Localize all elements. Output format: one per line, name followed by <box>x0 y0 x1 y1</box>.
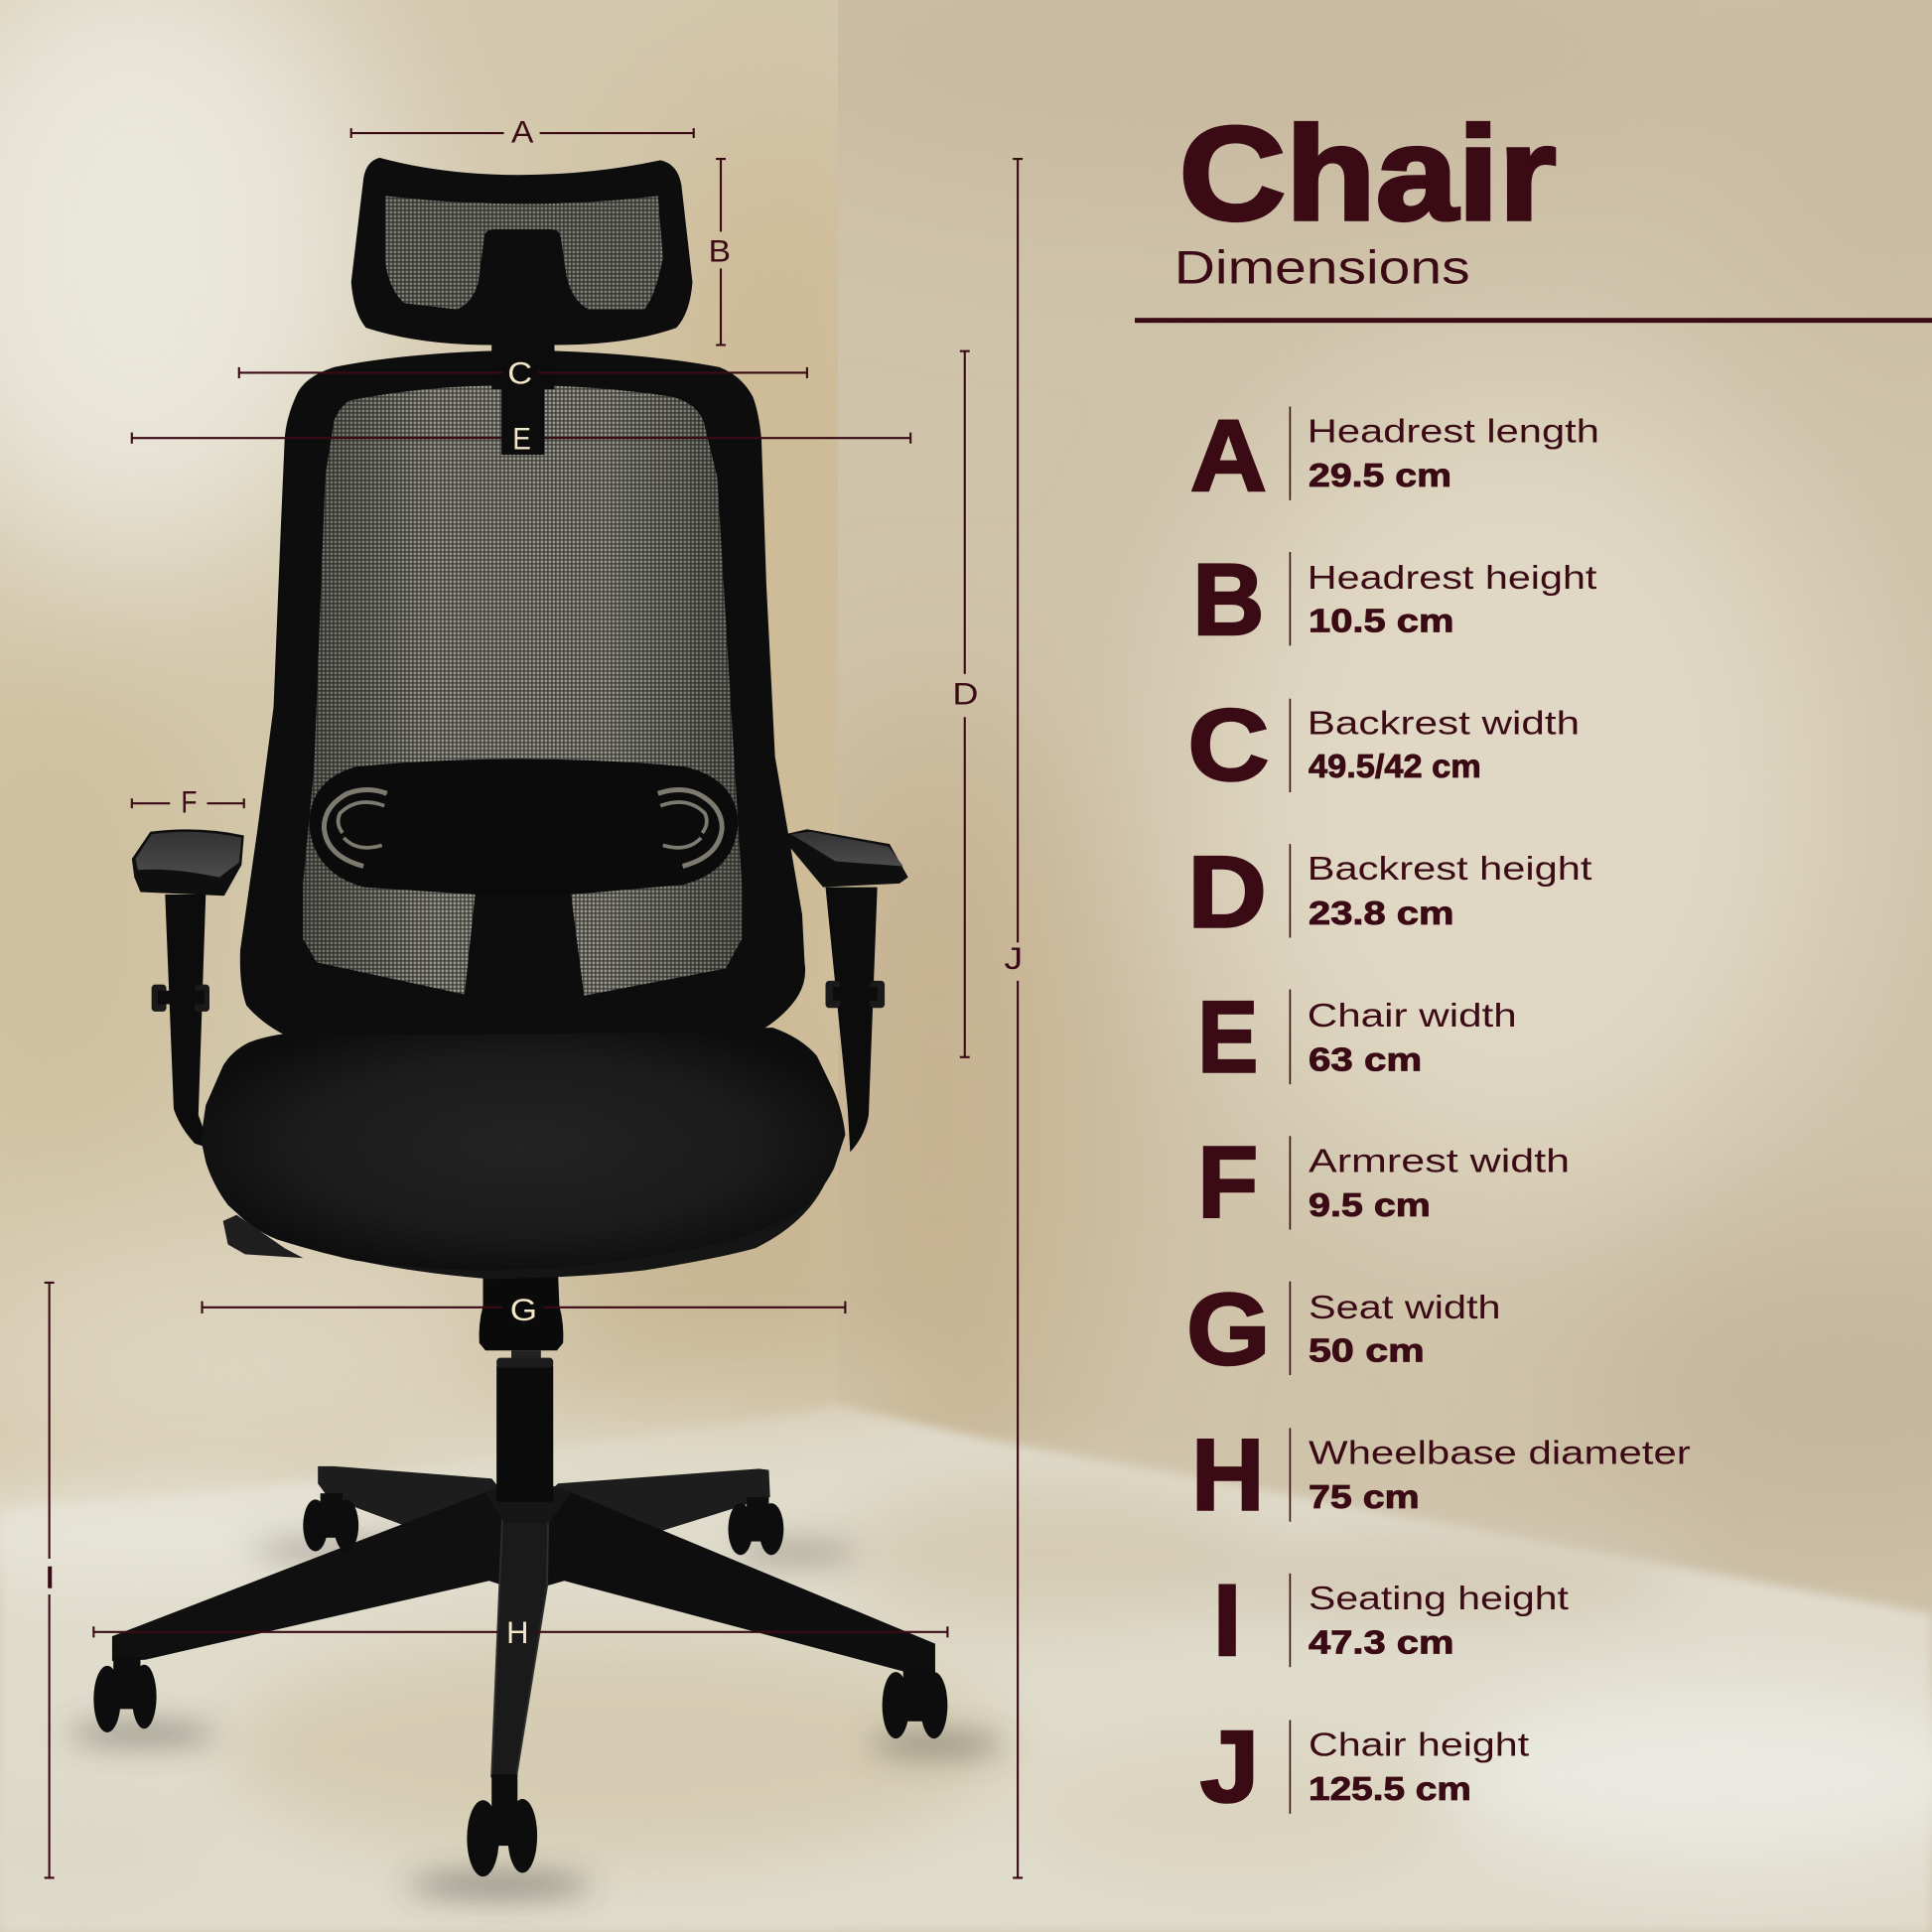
backrest frame <box>240 345 805 1035</box>
dimension A: A <box>511 113 534 149</box>
dimension A <box>351 113 694 149</box>
row J <box>1200 1710 1530 1823</box>
seat cushion <box>201 1028 845 1279</box>
spec list <box>1186 399 1691 1823</box>
dimension C <box>239 355 807 391</box>
title: Chair: Chair <box>1179 100 1556 248</box>
row B: B <box>1192 543 1264 656</box>
row G: 50 cm <box>1309 1332 1425 1369</box>
row G <box>1186 1273 1501 1386</box>
headrest <box>351 158 692 345</box>
row I <box>1213 1564 1570 1677</box>
dimension I <box>45 1283 55 1877</box>
row E: E <box>1197 981 1258 1094</box>
gas lift column <box>480 1277 563 1502</box>
dimension C: C <box>507 355 532 391</box>
chair base: five-star legs <box>112 1466 935 1777</box>
dimension F: F <box>181 783 198 819</box>
dimension I: I <box>45 1561 55 1595</box>
dimension G <box>203 1292 845 1327</box>
row E: 63 cm <box>1309 1041 1422 1078</box>
right armrest <box>780 829 908 1152</box>
row D: 23.8 cm <box>1309 896 1453 932</box>
row I: 47.3 cm <box>1309 1625 1453 1662</box>
dimension J <box>1004 159 1023 1877</box>
left armrest <box>132 829 244 1149</box>
row E <box>1197 981 1517 1094</box>
row J: Chair height <box>1309 1727 1530 1764</box>
row B: 10.5 cm <box>1309 604 1453 640</box>
row F: 9.5 cm <box>1309 1187 1431 1224</box>
caster wheels <box>93 1493 947 1876</box>
title block <box>1135 100 1932 323</box>
floor <box>0 1405 1932 1932</box>
backrest top bracket <box>491 345 554 455</box>
row H: Wheelbase diameter <box>1309 1435 1691 1471</box>
row H: H <box>1191 1418 1264 1531</box>
row F: Armrest width <box>1309 1143 1570 1179</box>
chair illustration <box>93 158 947 1876</box>
row B <box>1192 543 1597 656</box>
row F: F <box>1197 1126 1258 1239</box>
subtitle: Dimensions: Dimensions <box>1174 240 1470 293</box>
lumbar support <box>310 759 738 895</box>
row G: G <box>1186 1273 1271 1386</box>
row C: C <box>1187 689 1269 802</box>
dimension E: E <box>512 420 531 456</box>
caster shadows <box>68 1539 1004 1896</box>
dimension B: B <box>709 233 731 269</box>
dimension D <box>952 351 978 1057</box>
row F <box>1197 1126 1570 1239</box>
row C: Backrest width <box>1308 706 1580 743</box>
row I: Seating height <box>1309 1581 1570 1617</box>
row A <box>1190 399 1599 512</box>
row D: Backrest height <box>1308 851 1592 888</box>
row C <box>1187 689 1580 802</box>
row D <box>1187 835 1592 948</box>
row I: I <box>1213 1564 1241 1677</box>
row J: J <box>1200 1710 1259 1823</box>
dimension B <box>709 159 731 345</box>
row J: 125.5 cm <box>1309 1771 1471 1808</box>
row H: 75 cm <box>1309 1479 1420 1516</box>
title rule <box>1135 318 1932 323</box>
row A: 29.5 cm <box>1309 458 1451 494</box>
row C: 49.5/42 cm <box>1309 749 1481 785</box>
dimension H: H <box>506 1614 528 1650</box>
row B: Headrest height <box>1308 560 1597 597</box>
row G: Seat width <box>1309 1290 1501 1326</box>
dimension E <box>132 420 910 456</box>
row A: Headrest length <box>1308 414 1599 451</box>
dimension J: J <box>1004 940 1023 976</box>
dimension H <box>93 1614 947 1650</box>
row H <box>1191 1418 1691 1531</box>
dimension G: G <box>510 1292 537 1327</box>
row E: Chair width <box>1308 998 1517 1035</box>
row A: A <box>1190 399 1267 512</box>
row D: D <box>1187 835 1267 948</box>
backrest mesh panel <box>303 385 742 996</box>
dimension F <box>132 783 244 819</box>
dimension D: D <box>952 675 978 711</box>
